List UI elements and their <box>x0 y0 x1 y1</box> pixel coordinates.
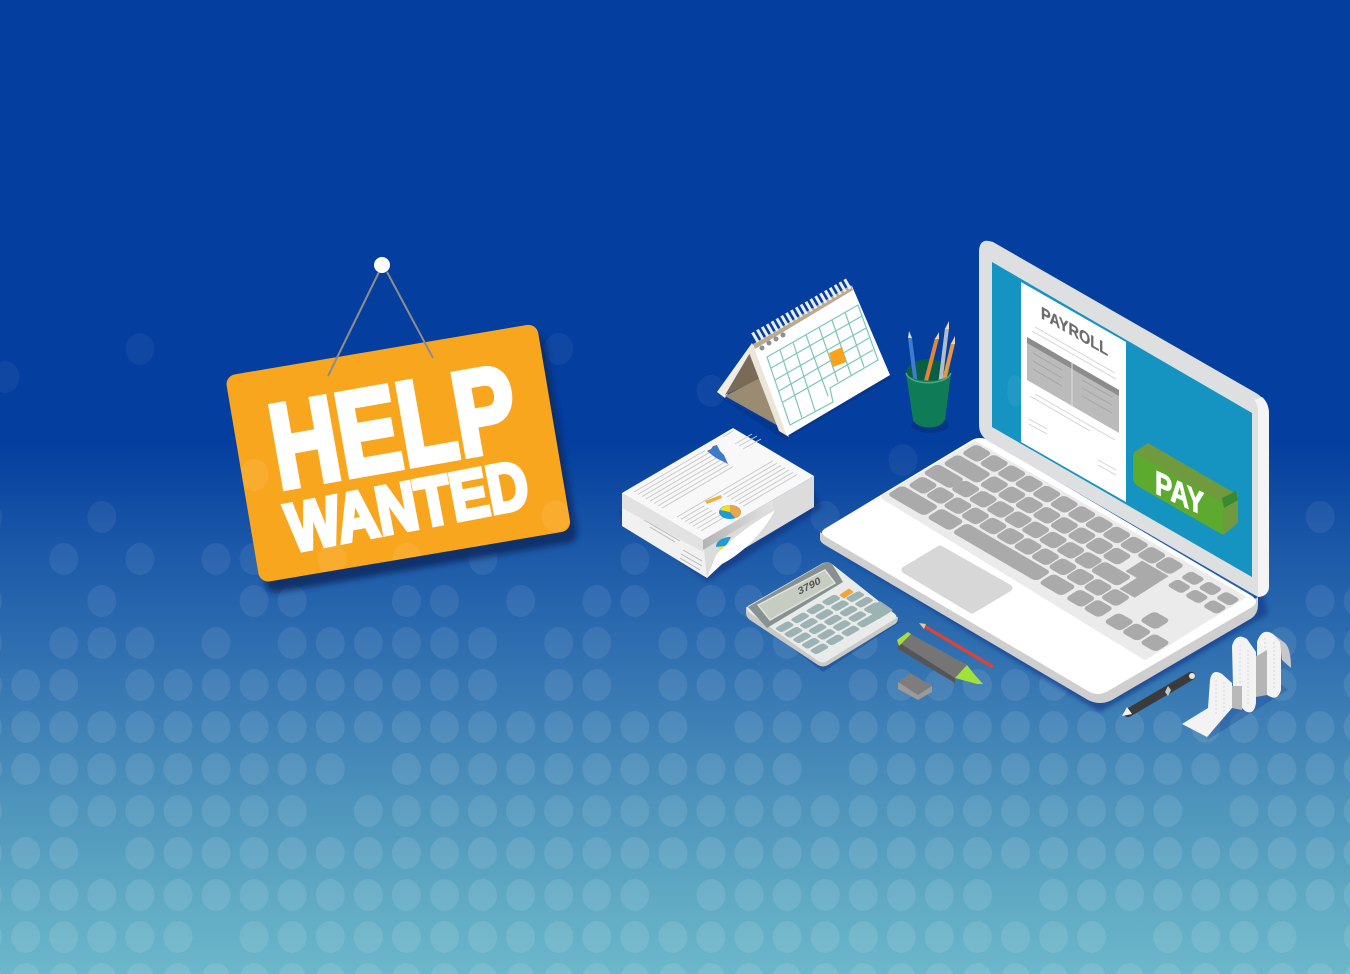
key row 2 <box>944 455 1131 565</box>
text lines <box>634 431 797 531</box>
calendar spiral rings <box>754 282 851 338</box>
laptop shadow <box>824 545 1268 712</box>
receipt segment three <box>1257 632 1281 698</box>
grey pencil <box>940 328 947 385</box>
keyboard keys <box>887 442 1241 652</box>
calculator shadow <box>746 612 900 672</box>
desk calendar <box>716 282 892 440</box>
pie chart <box>719 505 741 519</box>
receipt roll <box>1182 632 1291 740</box>
grey spine strip <box>703 500 773 550</box>
blue pencil <box>910 338 916 385</box>
trackpad <box>905 549 1009 610</box>
laptop <box>820 241 1269 712</box>
highlighted date <box>829 347 846 367</box>
pencil body <box>924 626 993 667</box>
background dot pattern <box>0 349 1350 974</box>
stack shadow <box>618 490 822 582</box>
calendar grid <box>767 305 878 425</box>
receipt last fold <box>1273 634 1291 668</box>
calendar binding holes <box>760 332 786 350</box>
display dot overlay <box>1007 375 1023 407</box>
screen right edge <box>1254 397 1269 597</box>
hanging sign: help wanted <box>225 257 579 594</box>
receipt print marks <box>1216 638 1274 715</box>
key rows <box>775 586 891 654</box>
calculator readout: 3790 <box>797 575 822 598</box>
button top face <box>1133 443 1238 503</box>
sign dots overlay <box>240 459 570 575</box>
cup body <box>906 373 951 428</box>
button side face <box>1223 495 1238 535</box>
button corner <box>1222 491 1238 508</box>
cup inside <box>906 359 950 387</box>
screen outer bezel <box>979 241 1269 597</box>
keyboard deck <box>883 443 1243 658</box>
calendar back white strip <box>717 343 756 398</box>
table divider <box>1071 363 1073 406</box>
lower rule lines <box>1029 394 1116 475</box>
orange calculator key <box>840 589 853 598</box>
paper <box>1021 282 1126 502</box>
cup rim <box>906 373 951 383</box>
calendar inner dark <box>725 346 760 395</box>
PAYROLL text: PAYROLL <box>1041 302 1108 360</box>
eraser <box>898 673 932 700</box>
receipt inner fold two <box>1256 650 1267 697</box>
table <box>1027 337 1119 433</box>
highlighter top <box>898 632 967 678</box>
pencil tip <box>919 623 926 629</box>
highlighter side <box>898 642 955 683</box>
white patch behind pie <box>703 494 748 520</box>
lower pie chart <box>716 537 731 550</box>
pen body <box>1128 676 1191 713</box>
receipt shadow <box>1207 675 1288 740</box>
upper rule lines <box>1032 327 1116 379</box>
HELP text: HELP <box>260 340 527 515</box>
paper stack <box>618 428 822 582</box>
key row 1 <box>962 445 1184 574</box>
highlighter <box>897 632 983 684</box>
calculator body <box>747 562 896 662</box>
base side <box>820 532 1258 703</box>
colour legend <box>705 495 722 504</box>
eraser side <box>898 682 932 700</box>
blue bar chart <box>707 445 728 464</box>
cup shadow <box>911 417 949 433</box>
pen tip <box>1122 707 1132 716</box>
pencil cup <box>906 321 955 433</box>
calculator top band <box>748 562 843 628</box>
curled page <box>707 510 775 578</box>
sign shadow <box>232 334 579 594</box>
pen band <box>1165 686 1171 696</box>
calculator keys <box>775 586 891 654</box>
button front face <box>1133 454 1223 535</box>
calculator <box>746 562 900 672</box>
calendar side edge <box>748 345 789 437</box>
key row 4 <box>909 476 1169 629</box>
calculator display <box>758 570 835 620</box>
calendar shadow <box>716 372 892 440</box>
calculator side <box>746 607 898 666</box>
sign board <box>225 323 572 583</box>
upper slab underside <box>622 493 703 552</box>
calendar front page <box>753 286 890 436</box>
numeric pad keys <box>1168 571 1239 614</box>
eraser top <box>898 673 932 695</box>
PAY button <box>1133 443 1238 535</box>
inner page lines <box>644 516 702 570</box>
top face <box>622 428 814 540</box>
key row 5 with space bar <box>887 486 1170 651</box>
stack right face <box>703 476 814 578</box>
receipt segment two <box>1232 637 1256 712</box>
stack left face <box>622 493 722 578</box>
large calculator key <box>866 601 893 619</box>
red pencil <box>919 623 993 667</box>
pen <box>1122 673 1195 716</box>
payroll document <box>1021 282 1126 502</box>
calendar top binding <box>753 285 853 349</box>
hanging strings <box>328 272 433 376</box>
calendar inner floor <box>725 378 782 428</box>
display <box>992 262 1252 577</box>
orange pencil two <box>943 343 953 385</box>
orange pencil <box>925 338 937 385</box>
receipt segment one <box>1182 672 1232 737</box>
table row lines <box>1033 353 1112 413</box>
enter key <box>1109 561 1168 597</box>
nail <box>374 257 390 273</box>
WANTED text: WANTED <box>281 446 534 567</box>
highlighter tip <box>955 665 983 684</box>
key row 3 <box>924 464 1131 586</box>
receipt inner fold one <box>1232 684 1242 710</box>
pen end <box>1189 673 1195 679</box>
pencil tips <box>908 321 955 344</box>
base top <box>822 438 1256 694</box>
scene: help wanted sign and payroll desk illustration <box>0 240 1350 974</box>
PAY label: PAY <box>1155 465 1204 524</box>
highlighter end cap <box>897 632 911 646</box>
table header <box>1027 337 1119 396</box>
